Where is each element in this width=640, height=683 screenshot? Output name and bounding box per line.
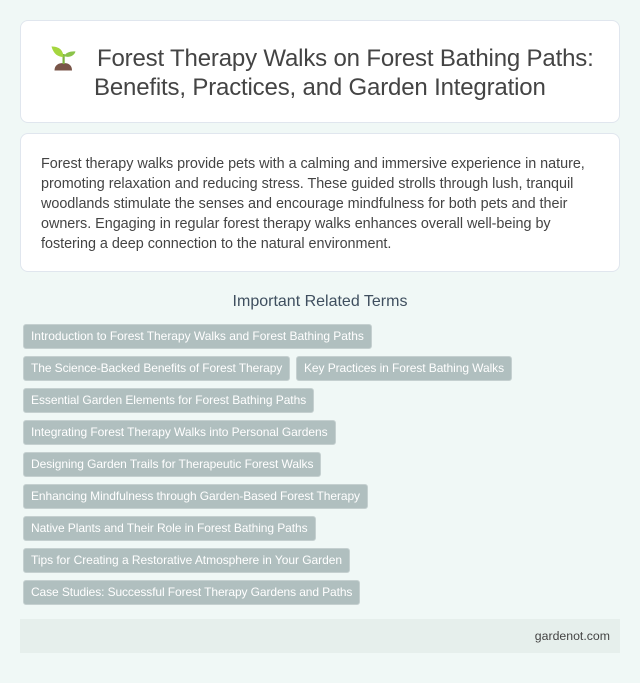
header panel <box>20 20 620 123</box>
tag <box>23 388 314 413</box>
intro text panel <box>20 133 620 272</box>
tag: Essential Garden Elements for Forest Bathing Paths <box>31 393 306 407</box>
title: Forest Therapy Walks on Forest Bathing Paths: <box>97 45 594 72</box>
section heading: Important Related Terms <box>233 293 407 310</box>
tag <box>23 452 321 477</box>
icon: seedling <box>52 46 76 70</box>
tag: Integrating Forest Therapy Walks into Personal Gardens <box>31 425 328 439</box>
tag: Introduction to Forest Therapy Walks and Forest Bathing Paths <box>31 329 364 343</box>
intro paragraph: owners. Engaging in regular forest therapy walks enhances overall well-being by <box>41 216 551 232</box>
title: Benefits, Practices, and Garden Integration <box>94 74 546 101</box>
intro paragraph: woodlands stimulate the senses and encourage mindfulness for both pets and their <box>41 196 567 212</box>
tag <box>23 516 316 541</box>
tag: Designing Garden Trails for Therapeutic Forest Walks <box>31 457 313 471</box>
tag <box>296 356 512 381</box>
tag <box>23 356 290 381</box>
tag <box>23 548 350 573</box>
intro paragraph: promoting relaxation and reducing stress. These guided strolls through lush, tranquil <box>41 176 573 192</box>
intro paragraph: fostering a deep connection to the natural environment. <box>41 236 391 252</box>
tag <box>23 420 336 445</box>
intro paragraph <box>41 156 585 252</box>
footer bar <box>20 619 620 653</box>
tag <box>23 324 372 349</box>
related term tags <box>23 324 512 605</box>
tag: Case Studies: Successful Forest Therapy Gardens and Paths <box>31 585 352 599</box>
footer source text: gardenot.com <box>535 629 610 643</box>
tag: Native Plants and Their Role in Forest Bathing Paths <box>31 521 308 535</box>
tag: Tips for Creating a Restorative Atmosphere in Your Garden <box>31 553 342 567</box>
intro paragraph: Forest therapy walks provide pets with a calming and immersive experience in nature, <box>41 156 585 172</box>
tag <box>23 580 360 605</box>
title <box>94 45 594 101</box>
tag: Enhancing Mindfulness through Garden-Based Forest Therapy <box>31 489 360 503</box>
tag: The Science-Backed Benefits of Forest Therapy <box>31 361 282 375</box>
tag: Key Practices in Forest Bathing Walks <box>304 361 504 375</box>
tag <box>23 484 368 509</box>
